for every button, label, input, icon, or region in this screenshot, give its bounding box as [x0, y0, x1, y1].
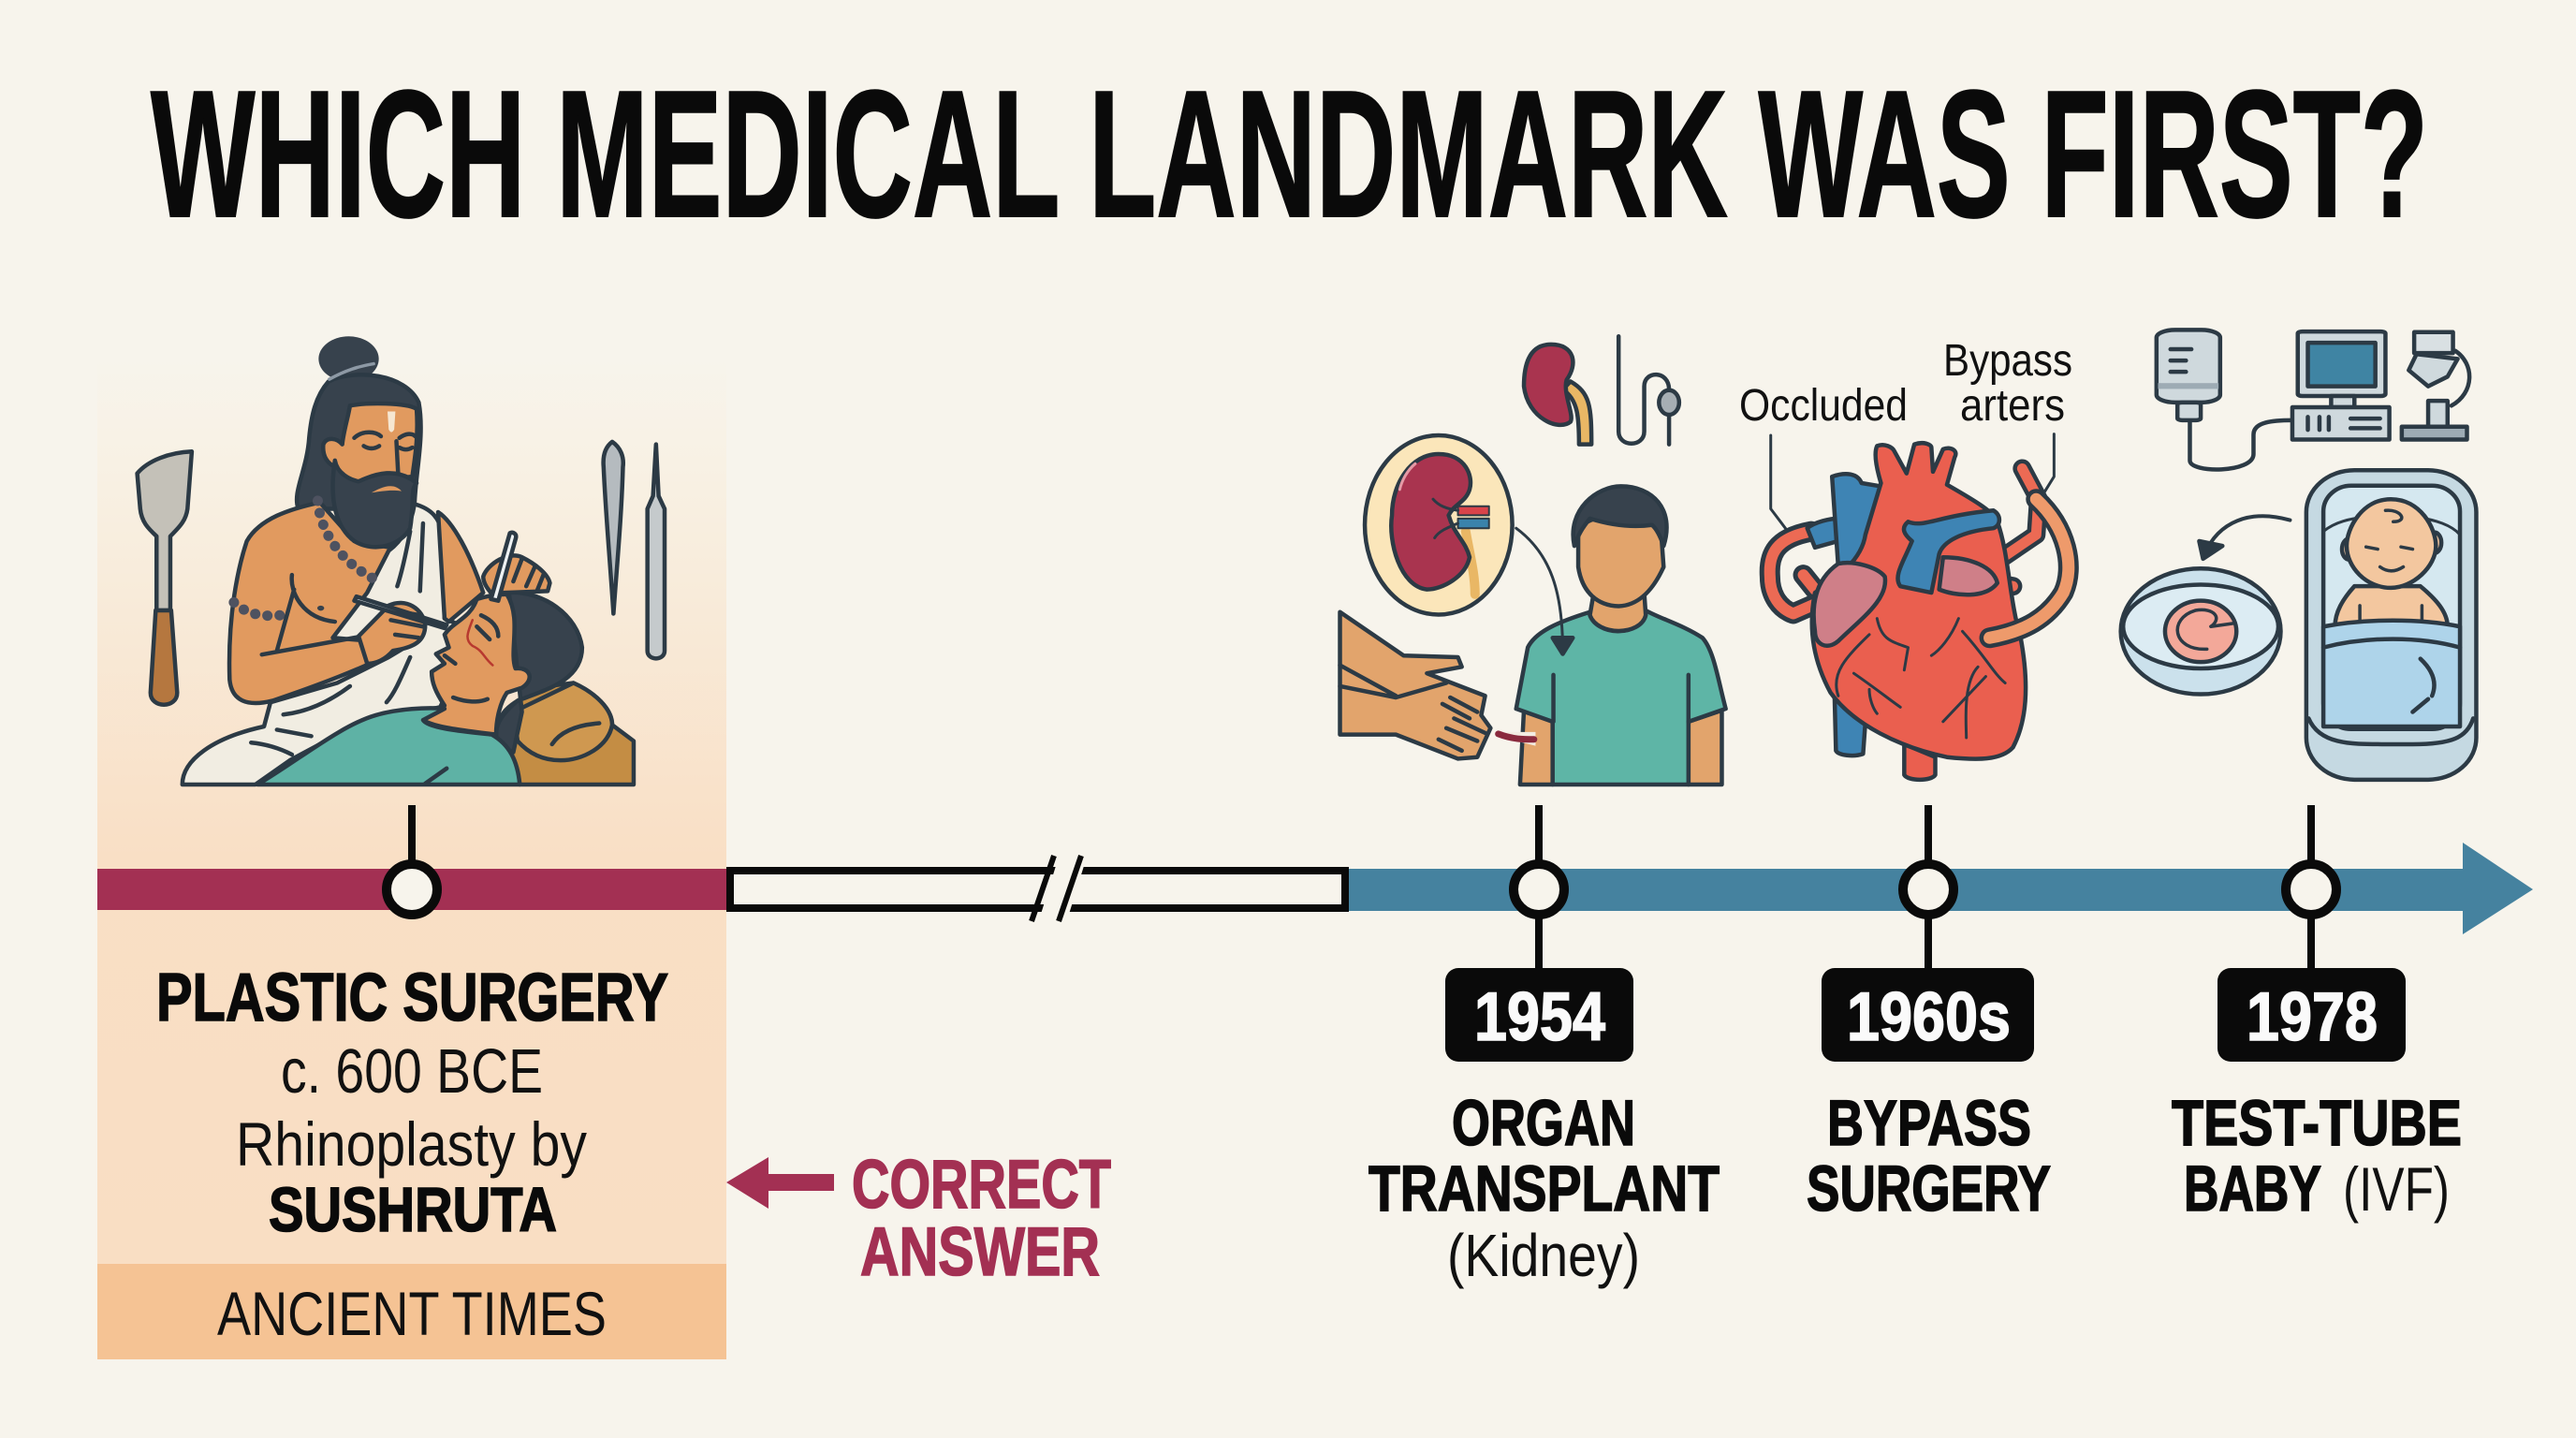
marker: 1954	[1514, 805, 1564, 968]
year badge: 1978	[2217, 968, 2406, 1062]
figure: patient	[257, 593, 634, 785]
icon: embryo petri dish	[2121, 568, 2280, 695]
text block: plastic surgery	[156, 961, 668, 1245]
icon: surgeon hands	[1340, 612, 1535, 758]
label: bypass surgery: SURGERY	[1807, 1152, 2051, 1225]
label: organ transplant: (Kidney)	[1447, 1222, 1640, 1289]
timeline: modern blue arrow	[1349, 843, 2533, 934]
marker: 1960s	[1903, 805, 1954, 968]
timeline: broken gap segment	[730, 854, 1345, 923]
year badge: 1954: 1954	[1474, 979, 1605, 1055]
icon: heart with bypass	[1770, 434, 2069, 780]
illustrations: modern landmarks	[1340, 330, 2476, 785]
label: organ transplant: TRANSPLANT	[1368, 1152, 1720, 1225]
icon: baby in incubator	[2306, 470, 2476, 780]
year badge: 1978: 1978	[2247, 979, 2378, 1055]
text block: plastic surgery: SUSHRUTA	[269, 1175, 557, 1245]
label: test-tube baby: BABY	[2184, 1152, 2321, 1225]
text block: plastic surgery: c. 600 BCE	[281, 1036, 543, 1107]
label: bypass surgery: BYPASS	[1827, 1087, 2031, 1159]
marker: plastic surgery	[387, 805, 437, 915]
label: test-tube baby: TEST-TUBE	[2172, 1087, 2462, 1159]
callout: correct answer	[852, 1147, 1111, 1290]
icon: tube and bulb	[1618, 336, 1679, 445]
year badge: 1960s: 1960s	[1847, 979, 2011, 1055]
arrow: embryo to baby	[2199, 516, 2290, 559]
heart annotation: bypass arteries	[1943, 336, 2072, 431]
text block: plastic surgery: PLASTIC SURGERY	[156, 961, 668, 1035]
callout: correct answer: ANSWER	[860, 1214, 1100, 1290]
hand holding scalpel	[354, 596, 446, 664]
band: ancient times	[97, 1264, 726, 1359]
band: ancient times: ANCIENT TIMES	[217, 1279, 607, 1348]
heart annotation: bypass arteries: Bypass	[1943, 336, 2072, 386]
year badge: 1954	[1445, 968, 1633, 1062]
label: bypass surgery	[1807, 1087, 2051, 1225]
label: test-tube baby: (IVF)	[2343, 1154, 2450, 1224]
icon: IV bag and computer	[2157, 330, 2390, 469]
timeline: ancient red segment	[97, 869, 726, 910]
heart annotation: occluded: Occluded	[1739, 381, 1908, 431]
figure: Sushruta	[183, 336, 483, 785]
panel: ancient times	[97, 356, 726, 1359]
icon: surgical needle	[604, 442, 623, 613]
hand on patient's head with forceps	[483, 533, 549, 601]
icon: kidney magnified circle	[1365, 435, 1513, 614]
icon: spatula tool	[138, 451, 192, 705]
icon: surgical probe	[648, 445, 665, 658]
figure: transplant patient	[1516, 486, 1726, 785]
heart annotation: bypass arteries: arters	[1960, 381, 2065, 431]
label: organ transplant: ORGAN	[1452, 1087, 1635, 1159]
label: test-tube baby	[2172, 1087, 2462, 1225]
text block: plastic surgery: Rhinoplasty by	[236, 1109, 587, 1179]
label: organ transplant	[1368, 1087, 1720, 1289]
arrow: correct answer pointer	[726, 1157, 834, 1209]
icon: small kidney	[1524, 345, 1591, 445]
illustration: Sushruta performing rhinoplasty	[138, 336, 665, 785]
marker: 1978	[2286, 805, 2336, 968]
icon: microscope	[2402, 332, 2469, 439]
callout: correct answer: CORRECT	[852, 1147, 1111, 1223]
arrow: kidney to patient	[1516, 528, 1573, 654]
